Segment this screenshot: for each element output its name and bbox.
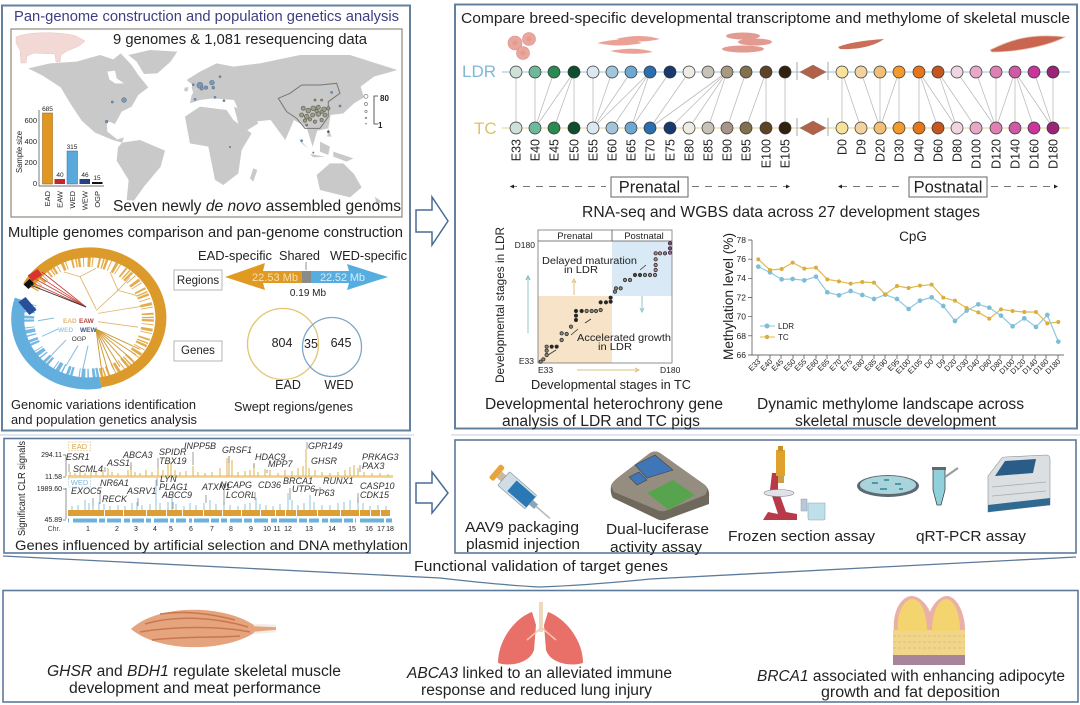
tree caption [11, 398, 197, 427]
specific regions arrows: 0.19 Mb [290, 288, 327, 299]
methylome caption: Dynamic methylome landscape across [757, 396, 1024, 413]
assay labels: qRT-PCR assay [916, 528, 1027, 545]
stage labels: E33 [510, 139, 524, 161]
manhattan axis: 45.89 [44, 517, 62, 524]
methylation line chart: E55 [793, 357, 808, 373]
tree group labels: EAD [63, 318, 77, 325]
function text: muscle: development and meat performance [69, 680, 321, 697]
methylation line chart: D20 [942, 357, 958, 373]
methylation line chart: D60 [977, 357, 993, 373]
methylation line chart: TC [778, 333, 789, 342]
methylation line chart: E100 [894, 357, 912, 376]
genes label box [174, 341, 222, 361]
EAD tag: EAD [72, 442, 88, 451]
methylation line chart: LDR [778, 322, 794, 331]
panel: validation assays [455, 440, 1076, 556]
sample size bar chart: 315 [67, 144, 78, 151]
world map box [11, 29, 402, 217]
methylation line chart: E65 [816, 357, 831, 373]
gene labels: CD36 [258, 480, 281, 490]
venn diagram: 804 [272, 336, 292, 350]
gene labels: MPP7 [268, 459, 294, 469]
baselines and separators [502, 62, 1070, 136]
gene labels: PAX3 [362, 461, 384, 471]
stage labels: D20 [874, 139, 888, 162]
methylation line chart: E50 [782, 357, 797, 373]
TC stage circles [510, 122, 1059, 134]
venn diagram: EAD [275, 378, 301, 392]
chromosome labels: 2 [115, 526, 119, 533]
assay labels: plasmid injection [466, 536, 580, 553]
methylome caption: skeletal muscle development [795, 413, 997, 430]
specific regions arrows: WED-specific [330, 249, 407, 263]
sample size bar chart: WEW [80, 190, 90, 210]
gene labels: LYN [160, 474, 177, 484]
chromosome labels: 14 [328, 526, 336, 533]
methylation line chart: E70 [828, 357, 843, 373]
stage labels: E70 [644, 139, 658, 161]
size legend: 80 [380, 94, 389, 103]
methylation line chart: 76 [737, 254, 746, 264]
assay labels [465, 519, 1027, 556]
chromosome labels: 3 [134, 526, 138, 533]
methylation line chart: D40 [965, 357, 981, 373]
row label: LDR: LDR [462, 62, 496, 81]
stage labels: D30 [892, 139, 906, 162]
methylation line chart: 66 [737, 350, 746, 360]
methylation line chart: E90 [874, 357, 889, 373]
methylation line chart: E85 [863, 357, 878, 373]
postnatal period bar: Postnatal [914, 178, 982, 196]
venn diagram [248, 308, 362, 392]
methylation line chart: E105 [906, 357, 924, 376]
stage labels: E85 [702, 139, 716, 161]
gene labels: GHSR [311, 456, 338, 466]
sample size bar chart: 685 [42, 106, 53, 113]
icon: luminometer [611, 452, 709, 520]
gene labels: SCML4 [73, 464, 103, 474]
assay labels: AAV9 packaging [465, 519, 579, 536]
pig [16, 33, 85, 63]
gene labels: UTP6 [292, 484, 315, 494]
function text: lung: ABCA3 linked to an alleviated immune [406, 665, 672, 682]
gene labels: RUNX1 [323, 476, 354, 486]
heading: pan-genome: Pan-genome construction and population genetics analysis [14, 9, 399, 25]
function text: fat: BRCA1 associated with enhancing adipocyte [757, 668, 1065, 685]
stage labels: D180 [1046, 139, 1060, 169]
brace curve [3, 556, 1076, 587]
gene labels: SPIDR [159, 447, 187, 457]
chromosome labels: 7 [210, 526, 214, 533]
gene labels: ASS1 [106, 458, 130, 468]
tree group labels [58, 318, 97, 343]
methylation line chart: D9 [934, 357, 947, 370]
sample size bar chart: EAD [43, 190, 52, 206]
heterochrony chart: Developmental stages in TC [531, 378, 691, 392]
chromosome labels: 15 [348, 526, 356, 533]
function text: fat [757, 668, 1065, 701]
gene labels: CDK15 [360, 490, 390, 500]
heterochrony chart: E33 [519, 356, 534, 366]
WED signal track [68, 480, 393, 520]
specific regions arrows [198, 249, 407, 299]
heterochrony caption: analysis of LDR and TC pigs [502, 413, 700, 430]
manhattan axis: 11.58 [45, 474, 62, 481]
stage labels: D120 [990, 139, 1004, 169]
gene labels: HDAC9 [255, 452, 286, 462]
heterochrony chart: D180 [515, 240, 535, 250]
row label: TC: TC [474, 119, 497, 138]
sample size bar chart: 0 [33, 179, 37, 188]
stage labels [510, 139, 1060, 169]
heterochrony chart: Developmental stages in LDR [493, 227, 507, 383]
venn diagram: 645 [331, 336, 351, 350]
heterochrony chart: E33 [538, 365, 553, 375]
gene labels: GPR149 [308, 441, 343, 451]
specific regions arrows: EAD-specific [198, 249, 272, 263]
world map [28, 50, 397, 205]
prenatal period bar [510, 177, 790, 197]
data caption: RNA-seq and WGBS data across 27 development stages [582, 204, 980, 221]
icon: lungs [498, 602, 583, 664]
stage labels: E60 [606, 139, 620, 161]
gene labels: LCORL [226, 490, 256, 500]
gene labels [66, 441, 399, 504]
stage labels: E90 [720, 139, 734, 161]
heterochrony chart: Prenatal [557, 231, 593, 242]
signals caption: Genes influenced by artificial selection and DNA methylation [15, 537, 408, 553]
manhattan axis: Significant CLR signals [17, 441, 28, 536]
validation caption: Functional validation of target genes [414, 559, 668, 575]
function text: fat: growth and fat deposition [821, 684, 1000, 701]
heterochrony chart: in LDR [564, 264, 598, 276]
methylation line chart: 70 [737, 312, 746, 322]
sample size bar chart: 40 [56, 172, 64, 179]
gene labels: NCAPG [220, 480, 252, 490]
gene labels: TBX19 [159, 456, 187, 466]
heterochrony caption [485, 396, 723, 430]
methylation line chart: E45 [770, 357, 785, 373]
stage labels: D0 [836, 139, 850, 155]
heterochrony chart [493, 227, 691, 392]
panel: pan-genome construction [2, 6, 410, 430]
sample size bar chart: Sample size [14, 131, 24, 173]
sample size bar chart: EAW [56, 190, 64, 208]
methylation line chart: E40 [759, 357, 774, 373]
gene labels: TP63 [313, 488, 335, 498]
sample size bar chart: 15 [93, 175, 101, 182]
chromosome labels: 1 [86, 526, 90, 533]
icon: PCR tube [932, 467, 958, 505]
manhattan axis [17, 441, 66, 536]
stage labels: E50 [568, 139, 582, 161]
methylation line chart: D30 [954, 357, 970, 373]
methylation line chart: E60 [805, 357, 820, 373]
heterochrony chart: Accelerated growth [577, 332, 671, 344]
methylation line chart: E33 [747, 357, 762, 373]
gene labels: GRSF1 [222, 445, 252, 455]
gene labels: EXOC5 [71, 486, 103, 496]
specific regions arrows: 22.52 Mb [320, 272, 365, 284]
methylation line chart: E75 [839, 357, 854, 373]
chromosome labels: Chr. [48, 526, 60, 533]
regions label box [174, 270, 222, 290]
map captions: 9 genomes & 1,081 resequencing data [113, 31, 368, 48]
heterochrony caption: Developmental heterochrony gene [485, 396, 723, 413]
methylation line chart: E95 [886, 357, 901, 373]
venn caption: Swept regions/genes [234, 399, 353, 414]
stage labels: D140 [1008, 139, 1022, 169]
chromosome labels: 6 [189, 526, 193, 533]
assay labels: activity assay [610, 539, 703, 556]
methylation line chart: D140 [1020, 357, 1039, 376]
stage labels: D9 [854, 139, 868, 155]
stage labels: D40 [912, 139, 926, 162]
gene labels: PRKAG3 [362, 452, 399, 462]
icon: muscle [131, 610, 276, 647]
EAD signal track [68, 449, 393, 476]
tree group labels: WED [58, 327, 73, 334]
venn diagram: 35 [304, 337, 318, 351]
stage labels: E100 [760, 139, 774, 168]
gene labels: INPP5B [184, 441, 216, 451]
chromosome labels: 4 [153, 526, 157, 533]
function text: muscle: GHSR and BDH1 regulate skeletal muscle [47, 663, 341, 680]
heterochrony chart: in LDR [598, 341, 632, 353]
methylation line chart: E80 [851, 357, 866, 373]
stage labels: D100 [970, 139, 984, 169]
icon: adipose tissue [893, 596, 965, 665]
function text: lung: response and reduced lung injury [421, 682, 652, 699]
methylation line chart: 72 [737, 292, 746, 302]
gene labels: PLAG1 [159, 482, 188, 492]
panel: selection signals [0, 435, 1080, 553]
size legend [364, 94, 389, 130]
stage labels: E95 [740, 139, 754, 161]
heading: multiple genomes: Multiple genomes comparison and pan-genome construction [8, 225, 403, 241]
gene labels: ABCC9 [161, 490, 192, 500]
stage labels: D80 [950, 139, 964, 162]
stage labels: E80 [682, 139, 696, 161]
china sample cluster [300, 99, 330, 126]
prenatal period bar: Prenatal [619, 178, 680, 196]
specific regions arrows: 22.53 Mb [252, 272, 298, 284]
phylogenetic tree [18, 252, 161, 383]
methylation line chart: D100 [997, 357, 1016, 376]
map captions [113, 31, 401, 215]
stage labels: E45 [548, 139, 562, 161]
tree caption: Genomic variations identification [11, 398, 196, 412]
methylation line chart: D180 [1043, 357, 1062, 376]
chromosome labels: 11 [273, 526, 281, 533]
china outline [278, 83, 340, 128]
heterochrony chart: D180 [660, 365, 681, 375]
panel: gene functions [3, 590, 1078, 702]
stage labels: E40 [528, 139, 542, 161]
icon: microscope [763, 446, 825, 520]
chromosome labels [48, 526, 394, 533]
sample size bar chart: 46 [81, 172, 89, 179]
tree group labels: WEW [80, 327, 97, 334]
heterochrony chart: Postnatal [624, 231, 664, 242]
manhattan axis: 294.11 [41, 452, 62, 459]
gene labels: BRCA1 [283, 476, 313, 486]
gene labels: ABCA3 [122, 450, 153, 460]
methylation line chart: Methylation level (%) [720, 233, 736, 360]
methylation line chart: 68 [737, 331, 746, 341]
chromosome labels: 10 [263, 526, 271, 533]
sample size bar chart [14, 106, 104, 210]
chromosome labels: 5 [169, 526, 173, 533]
sample size bar chart: 600 [24, 116, 37, 125]
sample dots [105, 76, 341, 153]
methylation line chart: D0 [922, 357, 935, 370]
assay labels: Dual-luciferase [606, 521, 709, 538]
cell icons [508, 32, 1065, 60]
LDR stage circles [510, 66, 1059, 78]
methylation line chart: D80 [988, 357, 1004, 373]
tree group labels: EAW [79, 318, 95, 325]
methylome caption [757, 396, 1024, 430]
gene pointers [69, 442, 360, 509]
regions label box: Regions [177, 275, 219, 287]
methylation line chart: D120 [1008, 357, 1027, 376]
manhattan axis: 1989.60 [37, 486, 62, 493]
methylation line chart: CpG [899, 229, 927, 244]
sample size bar chart: OGP [93, 191, 102, 208]
methylation line chart: D160 [1031, 357, 1050, 376]
specific regions arrows: Shared [279, 249, 320, 263]
sample size bar chart: 200 [24, 158, 37, 167]
chromosome labels: 9 [249, 526, 253, 533]
stage correspondence lines [516, 72, 1053, 128]
sample size bar chart: 400 [24, 137, 37, 146]
icon: culture dish [857, 475, 919, 497]
methylation line chart: 78 [737, 235, 746, 245]
stage labels: E105 [778, 139, 792, 168]
gene labels: ESR1 [66, 452, 90, 462]
gene labels: ASRV1 [126, 486, 156, 496]
WED tag: WED [71, 478, 89, 487]
genes label box: Genes [181, 345, 215, 357]
size legend: 1 [378, 121, 383, 130]
function text: lung [406, 665, 672, 699]
gene labels: NR6A1 [100, 478, 129, 488]
venn diagram: WED [324, 378, 354, 392]
tree group labels: OGP [72, 336, 86, 343]
chromosome labels: 13 [305, 526, 313, 533]
stage labels: E75 [664, 139, 678, 161]
map captions: Seven newly de novo assembled genoms [113, 198, 401, 215]
stage labels: E55 [586, 139, 600, 161]
sample size bar chart: WED [68, 190, 77, 208]
chromosome labels: 18 [386, 526, 394, 533]
birth diamonds [800, 65, 826, 135]
icon: syringe [489, 464, 556, 525]
assay labels: Frozen section assay [728, 528, 876, 545]
arrow: panel 1 to panel 2 [416, 197, 448, 245]
arrow: panel 3 to panel 4 [416, 472, 448, 513]
panel: developmental transcriptome and methylome [455, 4, 1077, 430]
gene labels: CASP10 [360, 481, 395, 491]
methylation line chart: 74 [737, 273, 746, 283]
methylation line chart [720, 229, 1064, 376]
gene labels: ATXN1 [201, 482, 230, 492]
chromosome labels: 12 [284, 526, 292, 533]
function text: muscle [47, 663, 341, 697]
heading: compare: Compare breed-specific developmental transcriptome and methylome of skeletal muscle [461, 10, 1070, 27]
icon: qPCR machine [988, 455, 1050, 512]
stage labels: D160 [1028, 139, 1042, 169]
postnatal period bar [838, 177, 1058, 197]
stage labels: E65 [624, 139, 638, 161]
stage labels: D60 [932, 139, 946, 162]
heterochrony chart: Delayed maturation [542, 255, 637, 267]
gene labels: RECK [102, 494, 128, 504]
chromosome labels: 8 [229, 526, 233, 533]
chromosome labels: 17 [377, 526, 385, 533]
tree caption: and population genetics analysis [11, 413, 197, 427]
chromosome labels: 16 [365, 526, 373, 533]
